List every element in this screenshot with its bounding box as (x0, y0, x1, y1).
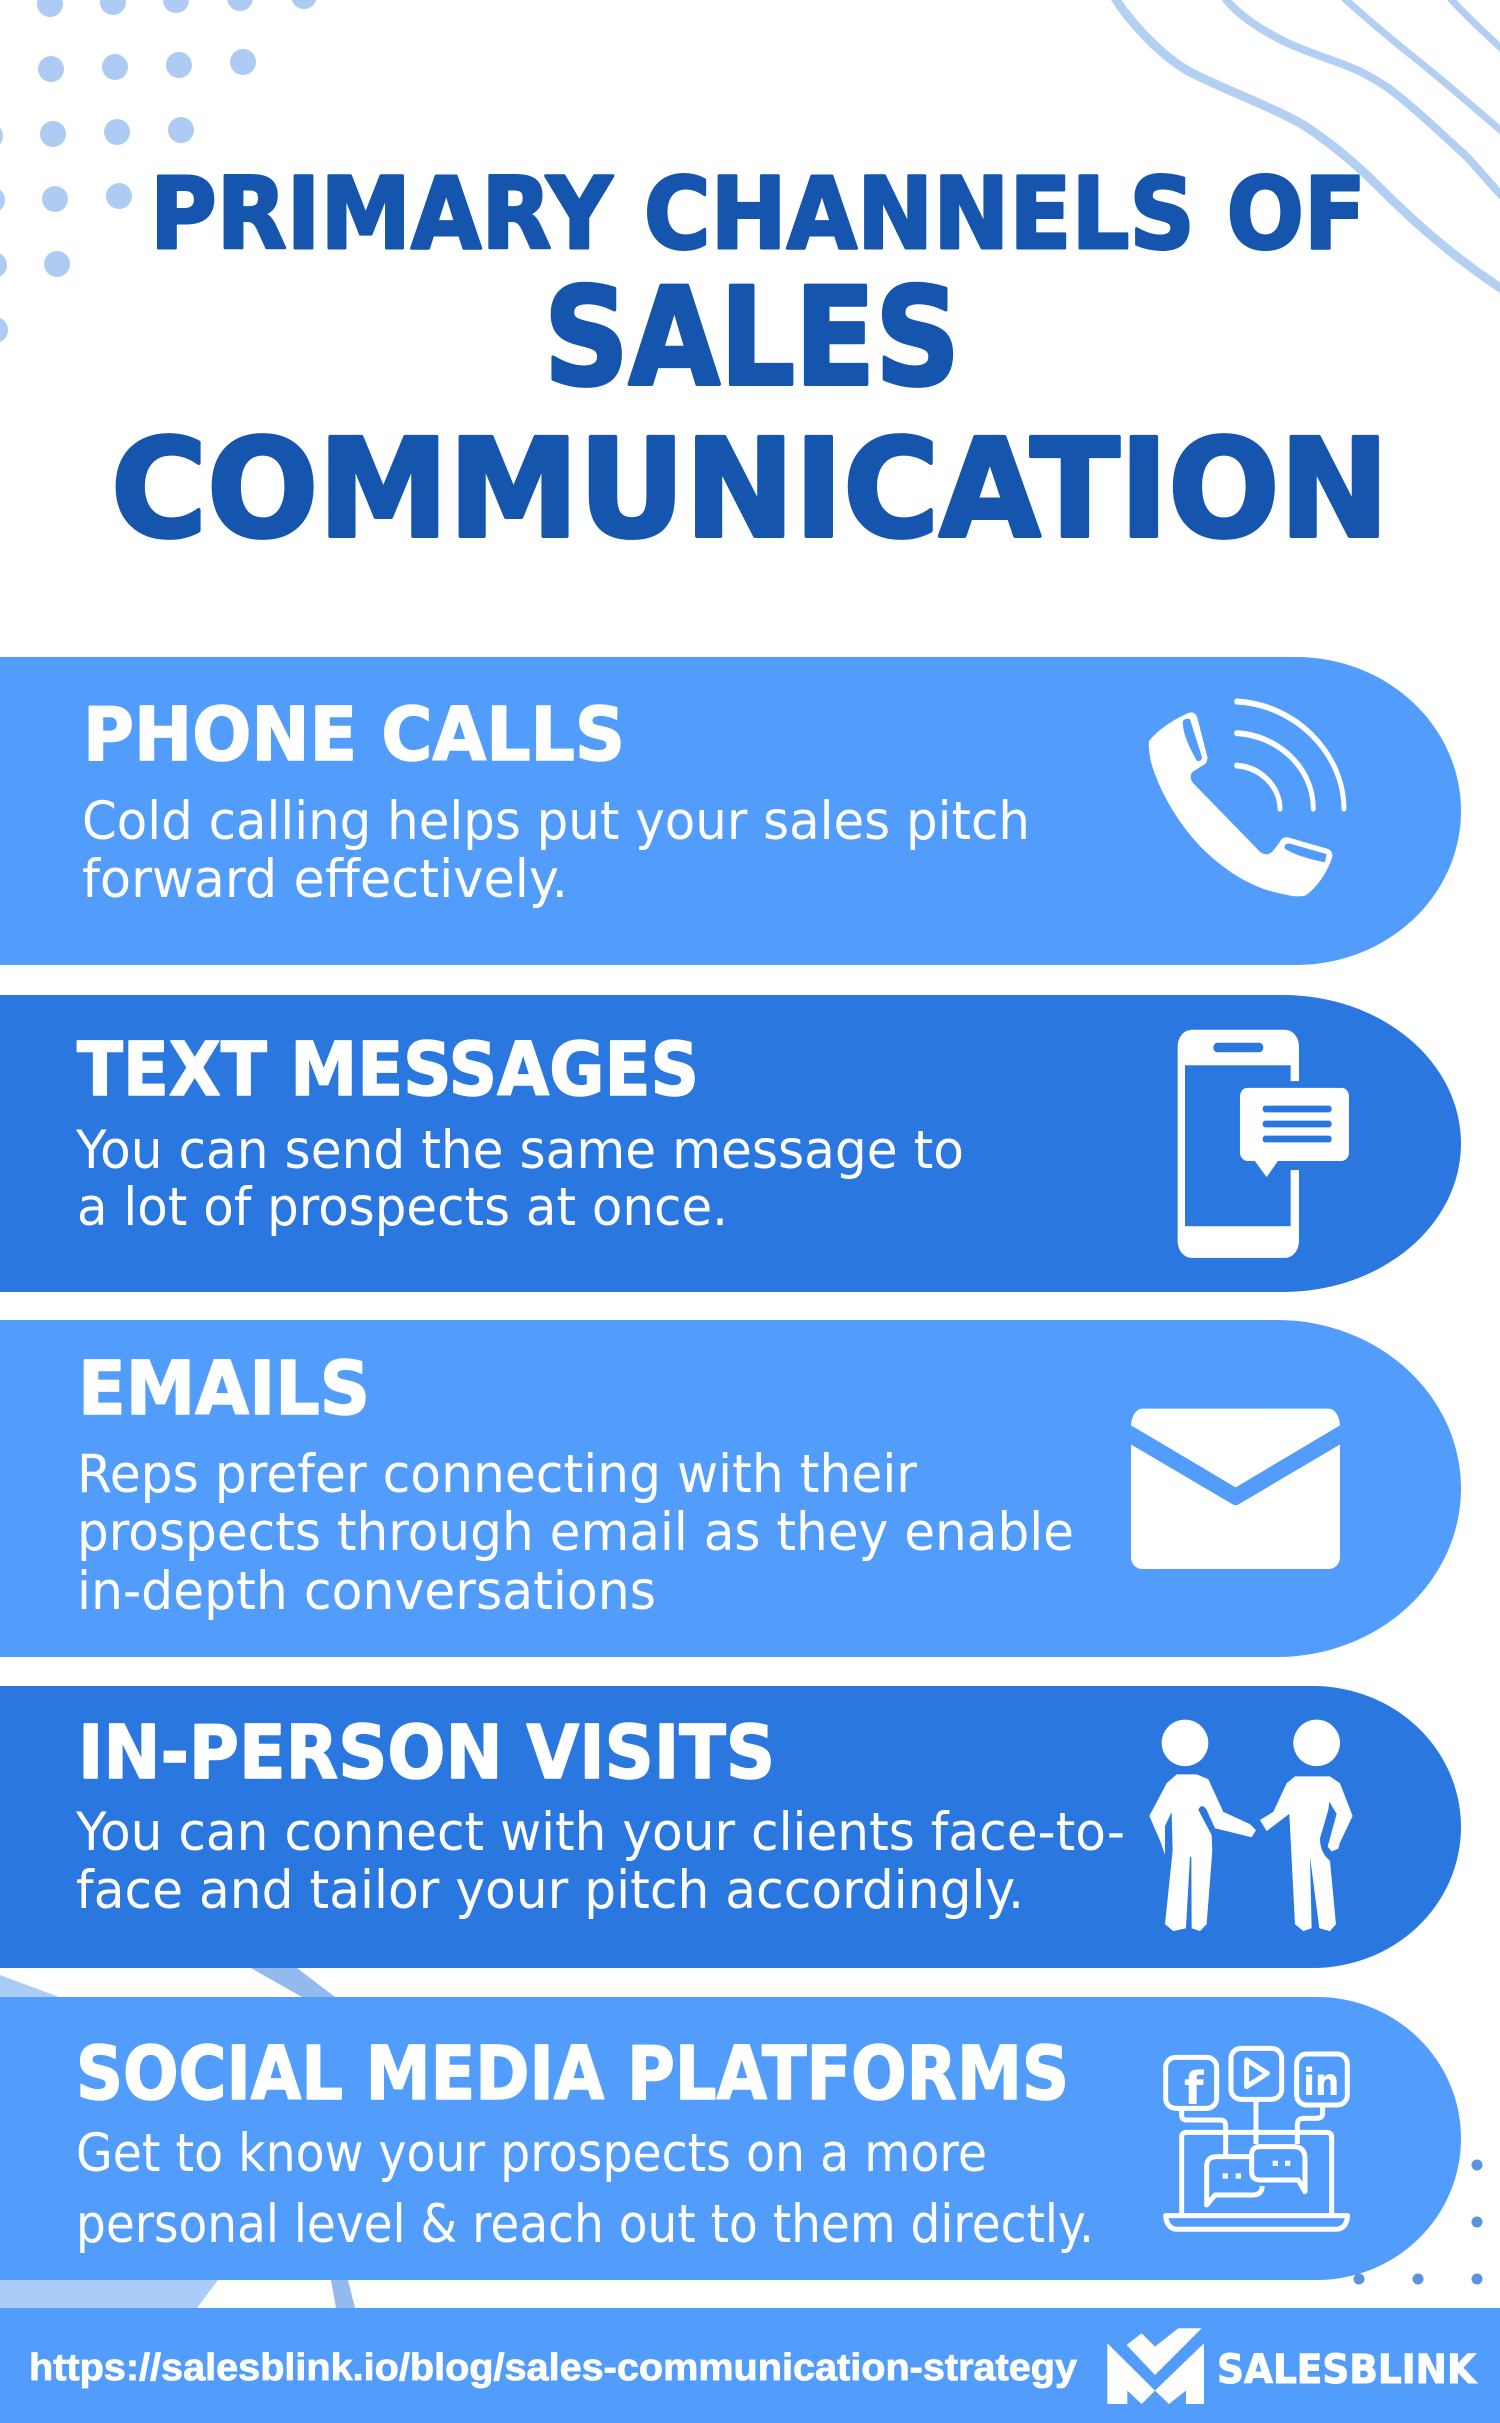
decorative dots top left (0, 0, 317, 343)
text: emails description: in-depth conversations (77, 1561, 656, 1622)
text: social media description: personal level & reach out to them directly. (76, 2194, 1094, 2255)
logo: salesblink wordmark: SALESBLINK (1217, 2347, 1478, 2393)
text: text messages description: You can send the same message to (75, 1120, 964, 1181)
text: phone calls description (82, 791, 1030, 910)
title: COMMUNICATION (111, 411, 1389, 569)
text: emails description: Reps prefer connecting with their (77, 1444, 917, 1505)
icon: envelope (1131, 1409, 1340, 1569)
heading: phone calls: PHONE CALLS (83, 692, 625, 778)
decorative waves top right (1115, 0, 1500, 291)
icon: laptop with social networks: f (1184, 2062, 1204, 2115)
text: emails description: prospects through email as they enable (77, 1502, 1074, 1563)
footer bar (0, 2308, 1500, 2423)
text: text messages description (75, 1120, 964, 1238)
icon: laptop with social networks (1166, 2048, 1348, 2229)
icon: telephone (1149, 702, 1344, 896)
panel: in-person visits (0, 1686, 1461, 1968)
text: in-person description (75, 1802, 1125, 1921)
text: text messages description: a lot of prospects at once. (77, 1177, 728, 1238)
panel: emails (0, 1320, 1461, 1657)
heading: emails: EMAILS (78, 1346, 370, 1432)
text: phone calls description: Cold calling helps put your sales pitch (82, 791, 1030, 852)
logo: salesblink mark (1107, 2328, 1204, 2404)
icon: smartphone with message bubble (1178, 1030, 1349, 1258)
heading: text messages: TEXT MESSAGES (77, 1027, 699, 1113)
decorative dots bottom right (1354, 2160, 1482, 2284)
title (111, 157, 1389, 569)
icon: two people shaking hands (1149, 1720, 1353, 1931)
text: social media description (76, 2123, 1094, 2255)
panel: phone calls (0, 657, 1461, 965)
url: https://salesblink.io/blog/sales-communication-strategy (29, 2347, 1077, 2389)
text: social media description: Get to know your prospects on a more (76, 2123, 987, 2184)
heading: in-person visits: IN-PERSON VISITS (78, 1710, 775, 1796)
text: in-person description: face and tailor your pitch accordingly. (76, 1860, 1024, 1921)
text: in-person description: You can connect with your clients face-to- (75, 1802, 1125, 1863)
text: emails description (77, 1444, 1074, 1622)
title: PRIMARY CHANNELS OF (150, 157, 1366, 272)
title: SALES (544, 259, 960, 416)
panel: social media platforms (0, 1997, 1461, 2280)
icon: laptop with social networks: in (1303, 2060, 1339, 2104)
panel: text messages (0, 995, 1461, 1292)
text: phone calls description: forward effectively. (82, 849, 568, 910)
heading: social media platforms: SOCIAL MEDIA PLATFORMS (76, 2031, 1069, 2117)
decorative shapes bottom left (0, 1968, 355, 2308)
